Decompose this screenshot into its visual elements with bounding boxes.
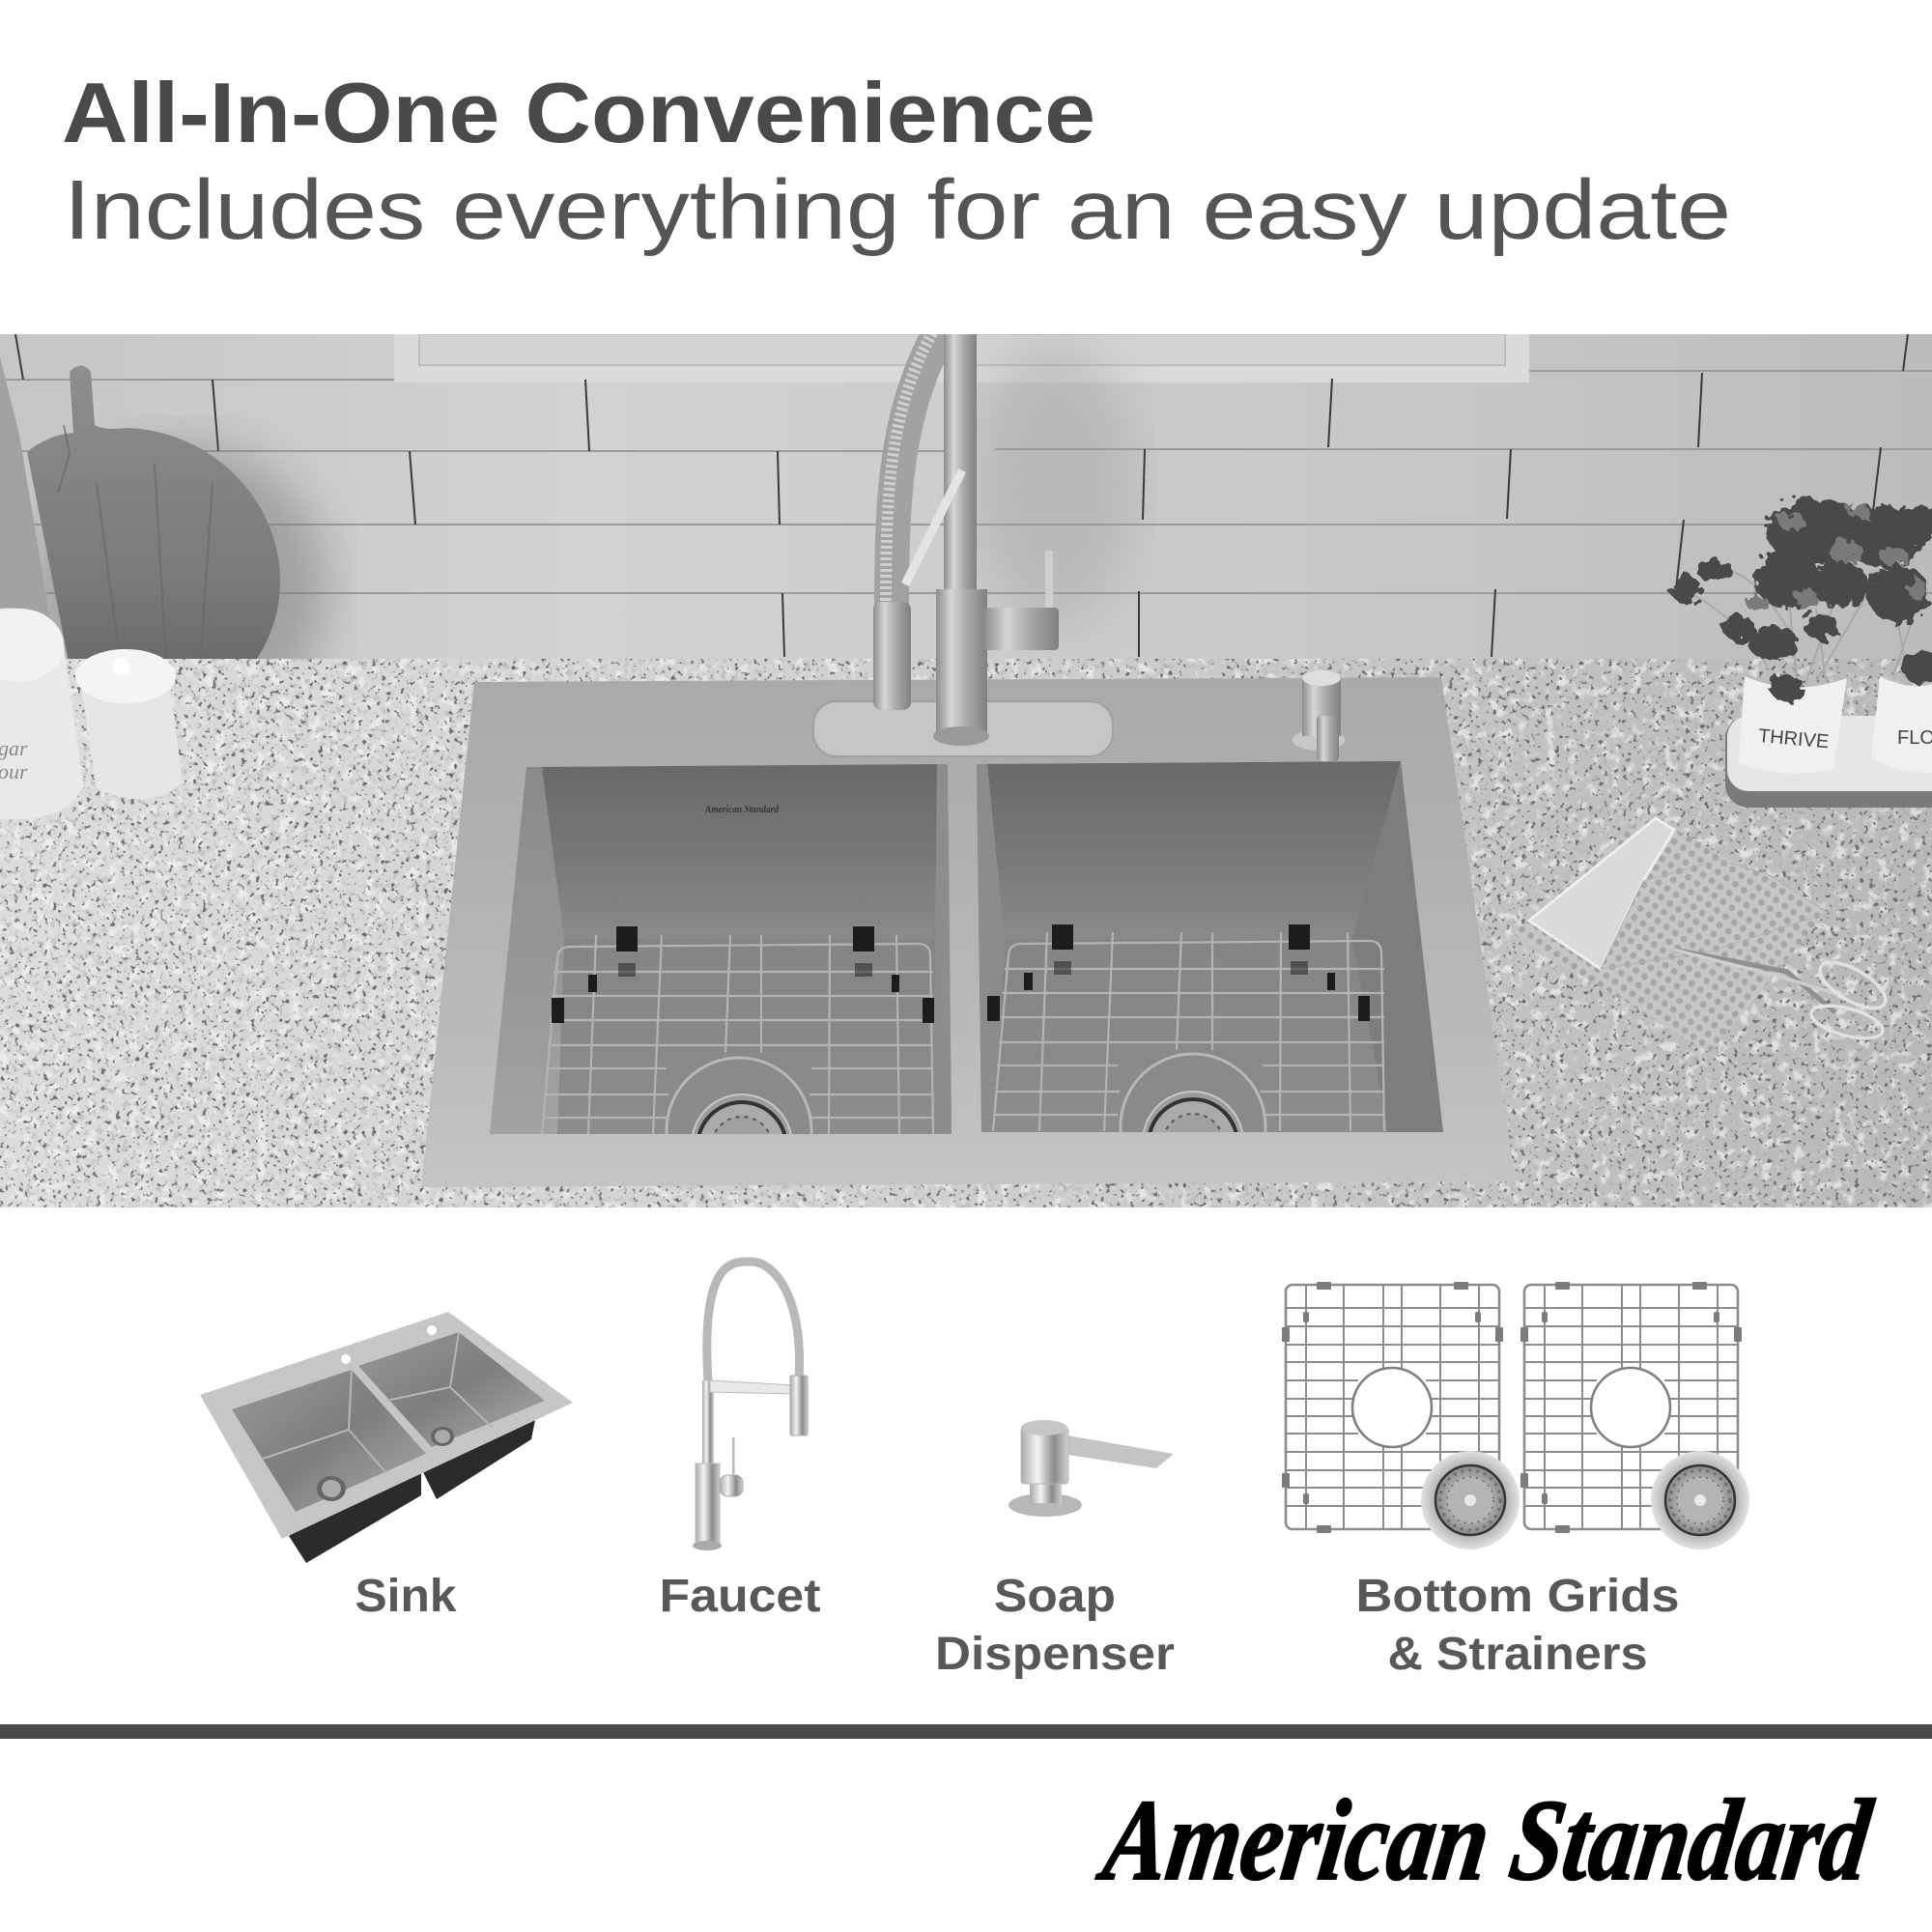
item: soap dispenser product [1009, 1420, 1174, 1517]
subtitle: Includes everything for an easy update [64, 163, 1731, 257]
label: soap dispenser: Dispenser [935, 1629, 1175, 1680]
panel: kitchen photo [0, 328, 1932, 1209]
item: faucet product [693, 1262, 808, 1550]
divider bar [0, 1724, 1932, 1739]
plant with pots and tray [1670, 498, 1932, 808]
plant with pots and tray: THRIVE [1757, 725, 1830, 753]
title: All-In-One Convenience [62, 65, 1095, 160]
left bowl rack [542, 935, 933, 1134]
canisters [0, 608, 183, 819]
brand mark in bowl: American Standard [704, 804, 779, 815]
right bowl [977, 761, 1443, 1132]
label: soap dispenser: Soap [994, 1571, 1116, 1622]
towel and scissors [1513, 813, 1892, 1053]
item: bottom grids and strainers [1282, 1282, 1749, 1549]
left bowl [490, 764, 952, 1134]
right bowl rack [993, 932, 1384, 1131]
label: bottom grids and strainers [1356, 1571, 1679, 1680]
faucet [873, 328, 1059, 746]
label: bottom grids and strainers: & Strainers [1387, 1629, 1648, 1680]
soap dispenser pump [1293, 670, 1345, 761]
label: sink: Sink [355, 1571, 457, 1622]
sink plate [421, 677, 1516, 1187]
cutting boards [0, 357, 348, 659]
tiled wall [0, 334, 1932, 663]
left drain [665, 1057, 813, 1134]
right drain [1119, 1053, 1267, 1132]
label: bottom grids and strainers: Bottom Grids [1356, 1571, 1679, 1622]
deck plate [813, 701, 1113, 756]
label: soap dispenser [935, 1571, 1175, 1680]
countertop granite [0, 659, 1932, 1209]
label: faucet: Faucet [659, 1571, 821, 1622]
item: sink product [200, 1312, 573, 1563]
